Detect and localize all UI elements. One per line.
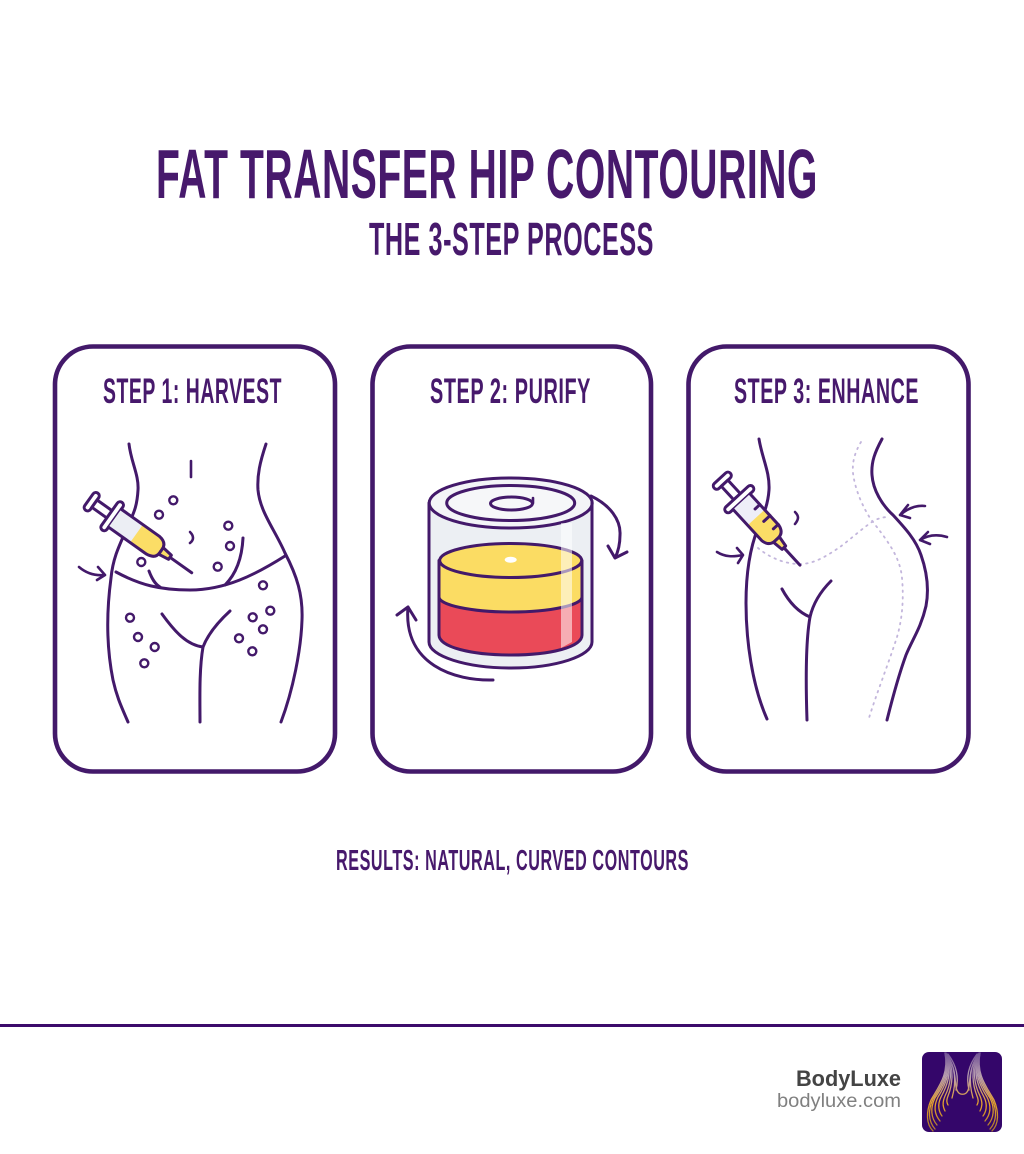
body outline side view [746,439,927,720]
dotted original contour [758,442,903,718]
arrow: clockwise left [397,607,493,680]
step 1 heading: STEP 1: HARVEST [103,372,282,411]
arrow: clockwise right [591,496,627,558]
fat deposit circles [126,496,274,667]
icon: logo [922,1052,1002,1132]
step 2 heading: STEP 2: PURIFY [430,372,591,411]
arrow: left [717,548,743,563]
footer divider [0,1024,1024,1027]
arrow: right upper [900,505,925,518]
panel: step 3 enhance [688,346,968,772]
footer url: bodyluxe.com [777,1091,901,1112]
panel: step 1 harvest [55,346,335,772]
subtitle: THE 3-STEP PROCESS [369,213,654,265]
icon: syringe [79,486,202,587]
results caption: RESULTS: NATURAL, CURVED CONTOURS [336,845,689,877]
panel: step 2 purify [372,346,651,772]
footer brand name: BodyLuxe [796,1066,901,1091]
arrow [79,567,105,580]
icon: centrifuge cylinder [429,478,592,668]
body outline front view [108,444,302,722]
arrow: right lower [920,532,947,544]
icon: syringe [706,466,814,578]
